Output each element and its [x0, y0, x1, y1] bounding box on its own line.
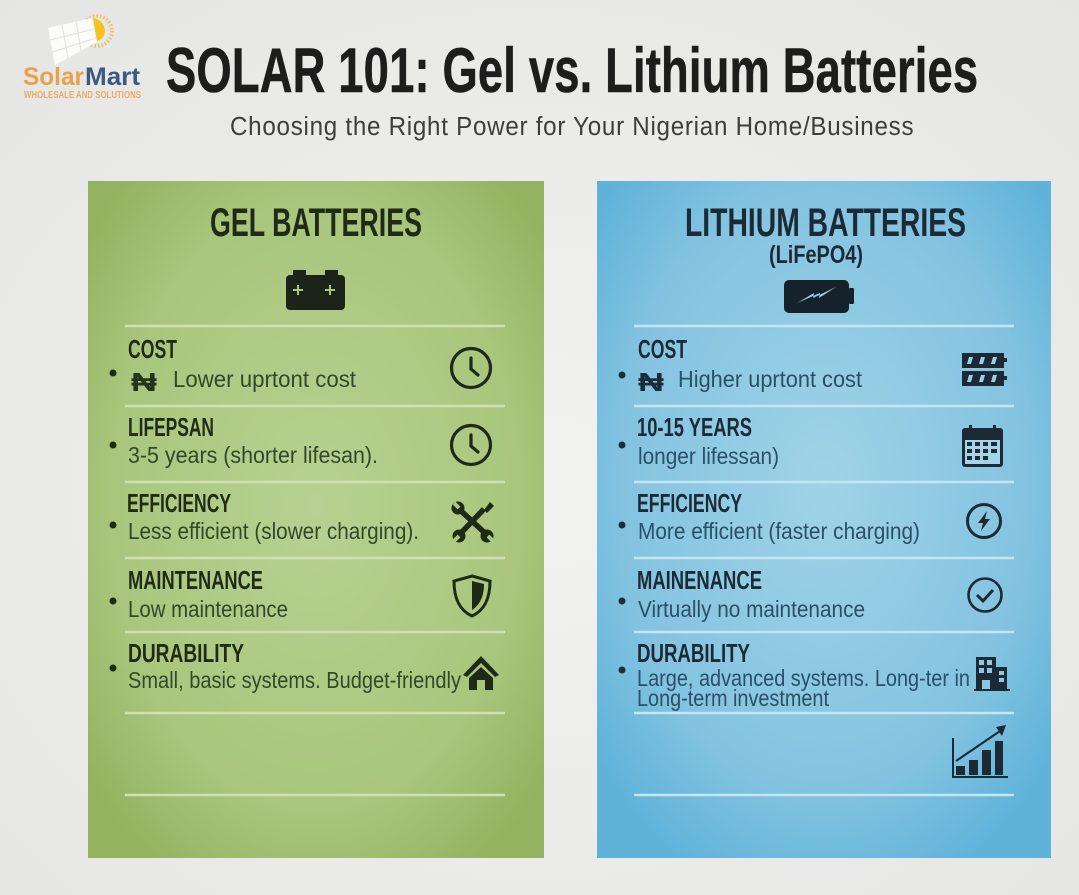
icon: check circle: [968, 578, 1002, 612]
icon: buildings: [974, 657, 1010, 691]
row: efficiency: EFFICIENCY: [637, 488, 742, 518]
row: cost: COST: [638, 334, 687, 364]
row: lifespan: LIFEPSAN: [128, 412, 214, 442]
row: maintenance: [618, 565, 1002, 622]
logo: SolarMart: Mart: [85, 63, 141, 91]
icon: battery bank: [962, 353, 1007, 386]
row: maintenance: Low maintenance: [128, 596, 288, 622]
row: durability: Large, advanced systems. Long-ter in: [637, 665, 970, 691]
row: efficiency: More efficient (faster charging): [638, 518, 920, 544]
icon: house: [463, 656, 499, 690]
icon: gel battery: [286, 270, 345, 310]
icon: lightning circle: [968, 504, 1000, 538]
row: lifespan: [618, 412, 1003, 469]
row: cost: [618, 334, 1007, 397]
title: SOLAR 101: Gel vs. Lithium Batteries: [166, 35, 978, 106]
row: durability: Small, basic systems. Budget-friendly: [128, 667, 461, 693]
row: lifespan: 3-5 years (shorter lifesan).: [128, 442, 378, 468]
logo: SolarMart: WHOLESALE AND SOLUTIONS: [24, 90, 141, 101]
logo: SolarMart: Solar: [23, 63, 84, 91]
row: efficiency: [110, 488, 494, 544]
row: durability: [110, 638, 499, 693]
subheading: LiFePO4: (LiFePO4): [769, 241, 863, 269]
icon: clock: [452, 348, 490, 388]
row: cost: Higher uprtont cost: [678, 366, 863, 392]
icon: solar panel with sun: [48, 16, 112, 65]
icon: calendar: [962, 425, 1003, 467]
icon: growth chart: [953, 725, 1008, 777]
row: efficiency: [618, 488, 1000, 544]
row: maintenance: [110, 565, 490, 622]
row: maintenance: MAINTENANCE: [128, 565, 263, 595]
row: efficiency: Less efficient (slower charging).: [128, 518, 419, 544]
icon: clock: [452, 426, 490, 464]
row: durability: DURABILITY: [128, 638, 244, 668]
subtitle: Choosing the Right Power for Your Nigerian Home/Business: [230, 112, 914, 141]
row: lifespan: longer lifessan): [638, 443, 779, 469]
row: cost: COST: [128, 334, 177, 364]
icon: lithium battery: [784, 280, 854, 313]
heading: gel batteries: GEL BATTERIES: [210, 201, 422, 245]
row: efficiency: EFFICIENCY: [127, 488, 231, 518]
panel: lithium batteries: [597, 181, 1051, 858]
heading: lithium batteries: LITHIUM BATTERIES: [685, 201, 966, 245]
row: maintenance: MAINENANCE: [637, 565, 762, 595]
logo: SolarMart: [23, 16, 141, 101]
row: cost: ₦: [131, 367, 157, 397]
row: maintenance: Virtually no maintenance: [638, 596, 865, 622]
icon: tools: [452, 502, 494, 542]
row: lifespan: 10-15 YEARS: [637, 412, 752, 442]
row: cost: ₦: [638, 367, 664, 397]
icon: shield: [454, 576, 490, 616]
panel: gel batteries: [88, 181, 544, 858]
row: durability: DURABILITY: [637, 638, 750, 668]
row: lifespan: [110, 412, 490, 468]
row: cost: Lower uprtont cost: [173, 366, 357, 392]
row: durability: [618, 638, 1010, 711]
row: cost: [110, 334, 490, 397]
row: durability: Long-term investment: [637, 685, 830, 711]
